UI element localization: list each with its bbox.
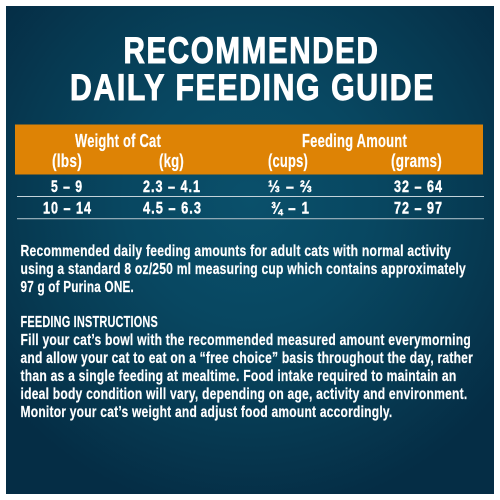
column heading: feeding amount: (cups): [268, 151, 308, 171]
table row: 5 to 9 lbs: ⅓ – ⅔: [268, 178, 313, 196]
table row: 5 to 9 lbs: 2.3 – 4.1: [143, 178, 201, 196]
table row: 5 to 9 lbs: 32 – 64: [394, 178, 443, 196]
title: RECOMMENDED: [124, 29, 380, 71]
heading: feeding instructions: FEEDING INSTRUCTIONS: [20, 314, 158, 331]
table row: 10 to 14 lbs: 72 – 97: [394, 200, 443, 218]
table row: 10 to 14 lbs: [43, 200, 443, 218]
table row: 10 to 14 lbs: ¾ – 1: [271, 200, 310, 218]
column heading: feeding amount: (grams): [391, 151, 442, 171]
column heading: weight of cat: (kg): [159, 151, 184, 171]
text block: recommended amounts: [20, 243, 466, 296]
table row: 5 to 9 lbs: [51, 178, 443, 196]
column heading: feeding amount: [268, 131, 442, 171]
table header band: [15, 124, 483, 174]
column heading: weight of cat: Weight of Cat: [75, 131, 161, 151]
panel: feeding table: [15, 124, 484, 219]
table row: 5 to 9 lbs: 5 – 9: [51, 178, 83, 196]
column heading: weight of cat: [52, 131, 184, 171]
column heading: feeding amount: Feeding Amount: [302, 131, 407, 151]
title: [70, 29, 435, 108]
column heading: weight of cat: (lbs): [52, 151, 82, 171]
table row: 10 to 14 lbs: 4.5 – 6.3: [143, 200, 202, 218]
text block: feeding instructions: [20, 332, 473, 421]
text block: recommended amounts: 97 g of Purina ONE.: [20, 279, 134, 296]
table row: 10 to 14 lbs: 10 – 14: [43, 200, 92, 218]
